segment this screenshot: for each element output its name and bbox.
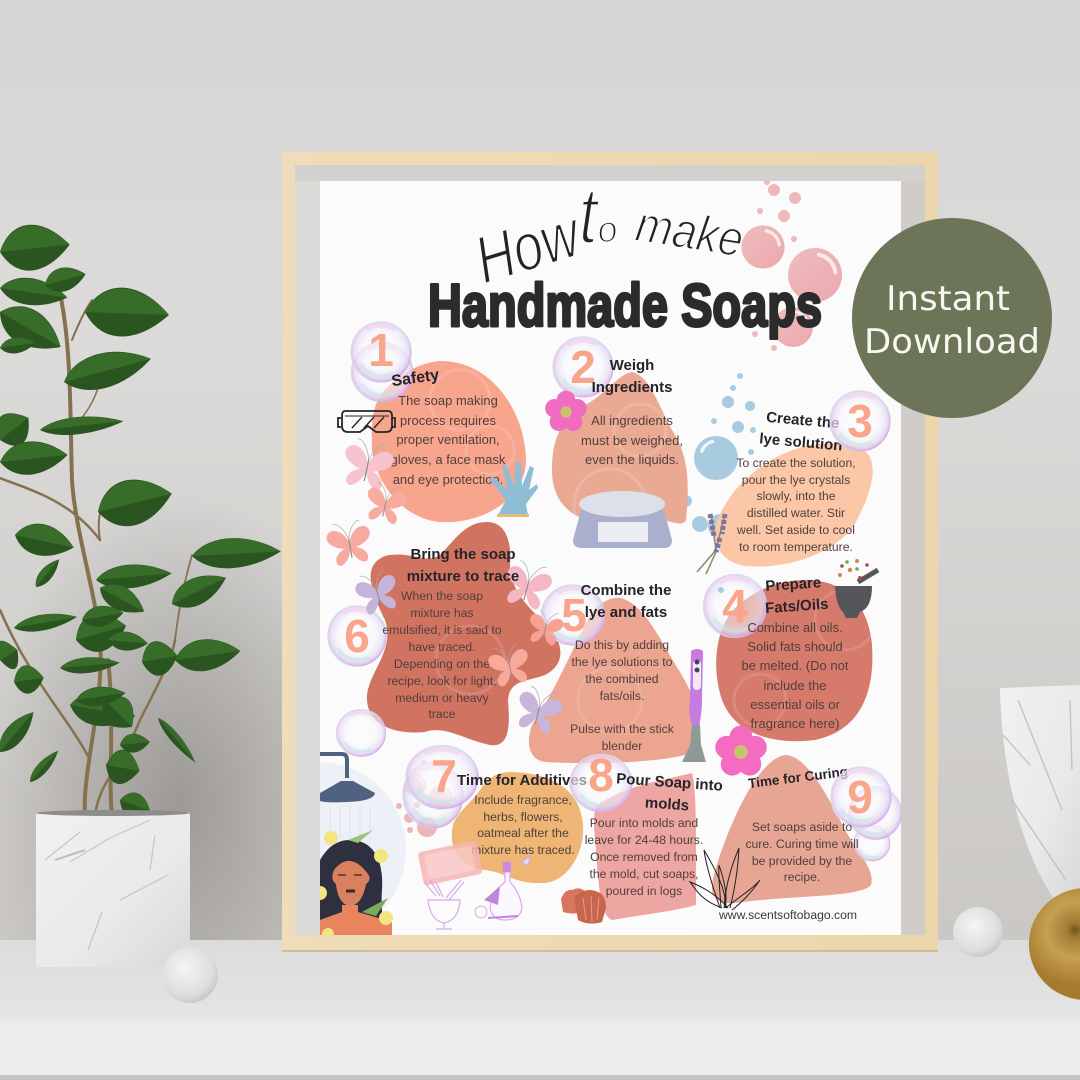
icon: mortar and herbs outline [424, 880, 464, 929]
heading 6: Bring the soap [410, 546, 516, 563]
badge: instant download: Download [864, 322, 1040, 362]
icon: woman [313, 830, 393, 940]
icon: butterfly coral [368, 482, 406, 524]
step 9 text: be provided by the [752, 854, 852, 868]
bubble number 3: 3 [847, 395, 873, 447]
bubble number 4 [704, 574, 766, 638]
step 3 text: To create the solution, [736, 456, 856, 470]
poster paper [320, 181, 901, 935]
icon: lavender [697, 514, 725, 574]
step 4 text: Solid fats should [747, 639, 843, 654]
poster content [320, 181, 901, 935]
badge: instant download [852, 218, 1052, 418]
icon: gloves [490, 462, 538, 517]
step 3 text: slowly, into the [756, 489, 836, 503]
step 4 text: include the [764, 678, 826, 693]
bubble number 6 [328, 606, 386, 666]
panel 1: safety [372, 361, 526, 522]
step 9 text: Set soaps aside to [752, 820, 852, 834]
step 6 text: have traced. [408, 640, 476, 654]
butterfly lilac lower [512, 684, 565, 736]
plant [0, 221, 282, 822]
watermark rings panel 2 [572, 402, 668, 516]
plant leaves [0, 221, 282, 822]
icon: pink flower [715, 726, 767, 776]
website url: www.scentsoftobago.com [718, 910, 857, 922]
step 6 text: Depending on the [394, 657, 490, 671]
icon: shower head [320, 754, 375, 845]
step 5 text: the lye solutions to [572, 655, 673, 669]
white ball left [162, 947, 218, 1003]
step 5 text: fats/oils. [600, 689, 644, 703]
panel 5: combine [529, 598, 700, 763]
icon: soap bar [417, 840, 483, 886]
bubble number 8 [570, 749, 632, 812]
step 9 text: recipe. [784, 870, 820, 884]
title script line: t [578, 170, 601, 260]
step 5 text: Do this by adding [575, 638, 669, 652]
step 4 text: essential oils or [750, 697, 840, 712]
step 2 text: must be weighed, [581, 433, 683, 448]
step 7 text: mixture has traced. [471, 843, 575, 857]
step 7 text: oatmeal after the [477, 826, 569, 840]
icon: mortar and spices [835, 559, 878, 618]
heading 5: Combine the [581, 582, 671, 599]
heading 8 [614, 770, 723, 817]
step 3 text: distilled water. Stir [747, 506, 845, 520]
step 9 text: cure. Curing time will [745, 837, 859, 851]
plant stems [0, 285, 192, 815]
blue bubbles [680, 373, 756, 538]
step 4 text: Combine all oils. [747, 620, 843, 635]
step 8 text: Once removed from [590, 850, 698, 864]
panel 3: lye solution [715, 408, 873, 567]
shower background circle [230, 762, 406, 938]
step 1 text: gloves, a face mask [391, 452, 506, 467]
gold ball [1029, 888, 1080, 1000]
picture frame [282, 152, 938, 952]
title main line: Handmade Soaps [428, 272, 822, 339]
bubble number 5: 5 [561, 589, 587, 641]
step 6 text: trace [428, 707, 456, 721]
heading 4: Prepare [765, 574, 822, 595]
step 7 text: Include fragrance, [474, 793, 572, 807]
icon: soap molds [561, 888, 606, 924]
step 8 text: Pour into molds and [590, 816, 698, 830]
heading 8: molds [644, 794, 690, 814]
bubble number 6: 6 [344, 610, 370, 662]
step 3 text: well. Set aside to cool [736, 523, 855, 537]
heading 4 [763, 574, 829, 617]
heading 5: lye and fats [585, 604, 667, 621]
icon: butterfly pink [346, 438, 394, 490]
step 6 text: emulsified, it is said to [382, 623, 502, 637]
step 6 text: mixture has [410, 606, 474, 620]
step 3 text: pour the lye crystals [742, 473, 850, 487]
panel 6: trace [367, 522, 560, 745]
heading 4: Fats/Oils [765, 596, 829, 617]
step 1 text: The soap making [398, 393, 498, 408]
bubble number 7 [403, 746, 478, 828]
step 2 text: All ingredients [591, 413, 673, 428]
step 1 text: proper ventilation, [396, 432, 500, 447]
step 4 text: fragrance here) [751, 716, 839, 731]
butterfly lilac [355, 570, 396, 614]
heading 2: Ingredients [592, 379, 672, 396]
bubble number 9: 9 [847, 771, 873, 823]
icon: bottle outline [490, 856, 530, 920]
watermark rings lower panels [436, 590, 875, 732]
panel 9: curing [712, 755, 872, 903]
icon: stick blender [682, 649, 706, 762]
title script line: How [466, 195, 591, 298]
icon: scale [573, 491, 672, 548]
step 6 text: When the soap [401, 589, 483, 603]
heading 2: Weigh [610, 357, 654, 374]
butterfly coral by 5 [530, 610, 564, 646]
step 3 text: to room temperature. [739, 540, 853, 554]
icon: butterfly coral lower [326, 520, 370, 566]
pink bubbles top right [741, 179, 842, 351]
bubble number 7: 7 [431, 750, 457, 802]
bubble number 2 [553, 337, 613, 397]
heading 2 [592, 357, 672, 396]
step 8 text: the mold, cut soaps, [589, 867, 699, 881]
bubble number 1: 1 [368, 324, 394, 376]
bubble number 1 [351, 322, 413, 401]
lone bubble [336, 710, 386, 756]
panel 2: weigh [552, 372, 688, 524]
heading 3: Create the [766, 409, 840, 432]
white ball right [953, 907, 1003, 957]
heading 8: Pour Soap into [616, 770, 723, 795]
bubble number 5 [542, 585, 604, 645]
heading 3 [760, 412, 842, 450]
heading safety: Safety [390, 367, 440, 390]
icon: flower outline [475, 886, 518, 918]
panel 4: fats [716, 580, 872, 741]
step 1 text: and eye protection. [393, 472, 503, 487]
step 6 text: medium or heavy [395, 691, 490, 705]
panel 8: molds [594, 773, 696, 920]
marble vase right [1000, 685, 1080, 905]
badge: instant download: Instant [886, 279, 1010, 319]
icon: goggles [338, 411, 395, 432]
step 6 text: recipe, look for light, [387, 674, 497, 688]
shelf [0, 940, 1080, 1080]
heading 6 [408, 548, 519, 581]
step 5 text: blender [602, 739, 642, 753]
heading 3: lye solution [759, 430, 843, 455]
step 8 text: poured in logs [606, 884, 682, 898]
bubble number 4: 4 [722, 580, 748, 632]
butterfly pink right [507, 560, 552, 610]
pink bubbles group 7 [396, 760, 452, 837]
step 7 text: herbs, flowers, [483, 810, 563, 824]
step 2 text: even the liquids. [585, 452, 679, 467]
heading 6: mixture to trace [407, 568, 519, 585]
step 4 text: be melted. (Do not [742, 658, 849, 673]
bubble number 3 [830, 391, 890, 451]
panel 7: additives [452, 772, 583, 883]
icon: aloe plant [690, 848, 760, 910]
heading 7: Time for Additives [457, 772, 587, 789]
step 8 text: leave for 24-48 hours. [585, 833, 703, 847]
heading 5 [581, 582, 671, 621]
bubble number 8: 8 [588, 749, 614, 801]
title script line: o [594, 208, 620, 251]
step 5 text: Pulse with the stick [570, 722, 675, 736]
title script line: make [632, 195, 747, 267]
marble pot [36, 810, 190, 967]
step 1 text: process requires [400, 413, 497, 428]
step 5 text: the combined [585, 672, 659, 686]
bubble number 9 [831, 767, 901, 861]
title script line [480, 192, 741, 282]
bubble number 2: 2 [570, 341, 596, 393]
butterfly coral centre [488, 644, 528, 686]
icon: flower [545, 391, 587, 431]
watermark rings panel 1 [430, 370, 514, 474]
heading 9: Time for Curing [747, 764, 849, 791]
